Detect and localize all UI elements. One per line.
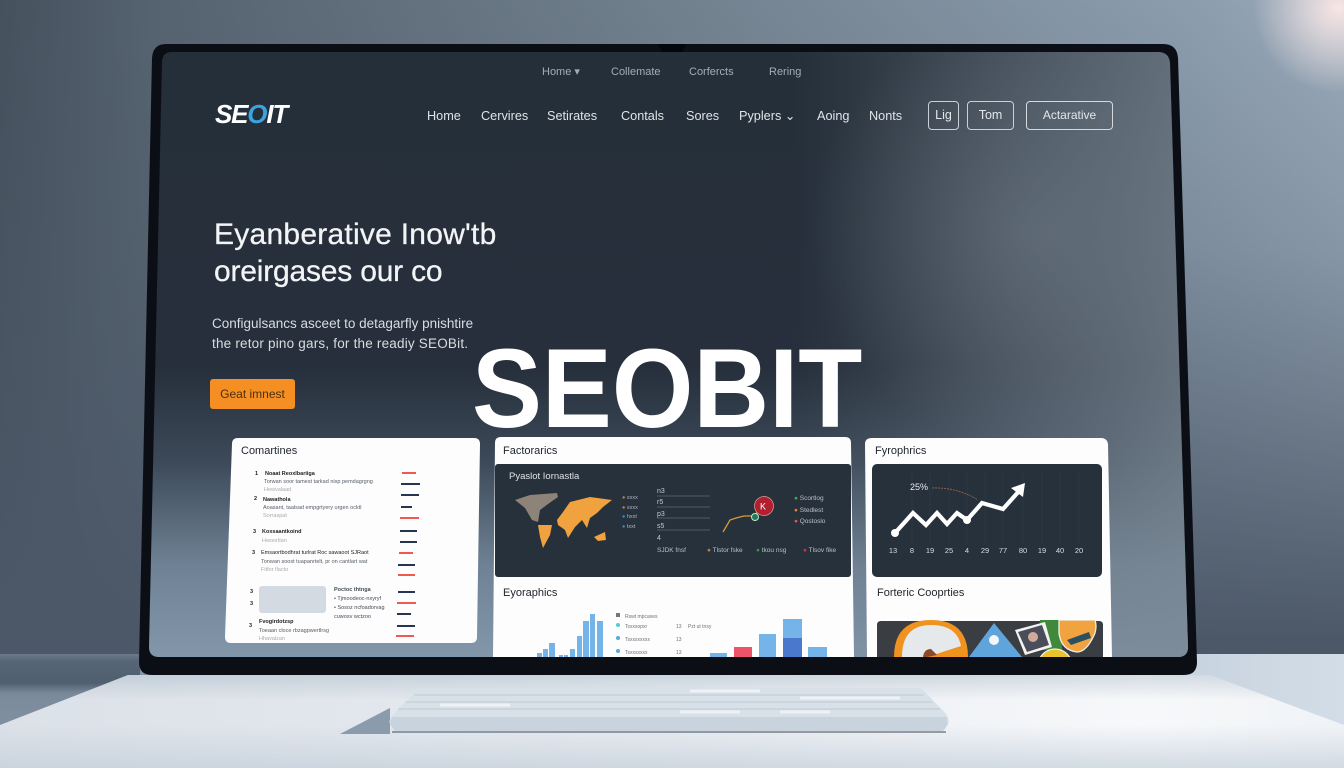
- panel heading: Factorarics: [503, 445, 557, 457]
- bottom legend: ● Tlstor fske: [707, 547, 743, 554]
- map legend: ● sxxx: [622, 495, 638, 501]
- image collage: [877, 620, 1103, 657]
- bar charts: 13: [676, 624, 682, 630]
- main navigation: Aoing: [817, 109, 849, 123]
- dark dashboard card: [495, 464, 851, 577]
- hero paragraph: [212, 316, 473, 351]
- trend line with marker: [722, 496, 774, 532]
- list entries: Aoasant, taalsad empgrtyery urgen ocktl: [263, 505, 361, 511]
- bar charts: Tsxxsxxxxx: [625, 637, 650, 643]
- call to action button: Geat imnest: [220, 387, 285, 401]
- line rows: n3: [657, 488, 665, 495]
- hero paragraph: Configulsancs asceet to detagarfly pnishtire: [212, 316, 473, 331]
- chart value label: 25%: [910, 482, 928, 492]
- line rows: 4: [657, 535, 661, 542]
- big title: SEOBIT: [472, 326, 862, 451]
- list entries: 2: [254, 496, 257, 502]
- desk surface: [0, 654, 1344, 768]
- main navigation: Home: [427, 109, 461, 123]
- main navigation: Contals: [621, 109, 664, 123]
- list entries: Hhavalzan: [259, 636, 285, 642]
- x axis labels: 29: [981, 546, 989, 555]
- list entries: Fvogirdotzsp: [259, 619, 294, 625]
- main navigation: [427, 109, 902, 123]
- x axis labels: 8: [910, 546, 914, 555]
- panel: Factorarics and Eyoraphics: [493, 437, 854, 657]
- dashboard title: Pyaslot Iornastla: [509, 471, 579, 482]
- logo: SEOIT: [215, 99, 287, 129]
- map legend: [622, 495, 638, 530]
- panel: Comartines: cuwosv wctzoo: [334, 614, 371, 620]
- hero heading: [214, 218, 497, 288]
- x axis labels: [889, 546, 1083, 555]
- top secondary navigation: Corfercts: [689, 66, 734, 78]
- bar charts: 13: [676, 637, 682, 643]
- hero paragraph: the retor pino gars, for the readiy SEOBit.: [212, 336, 468, 351]
- line rows: p3: [657, 511, 665, 518]
- hero heading: Eyanberative Inow'tb: [214, 218, 497, 251]
- side legend: ● Stedlest: [794, 506, 823, 514]
- lower heading: Eyoraphics: [503, 587, 557, 599]
- line rows: [657, 488, 710, 542]
- x axis labels: 77: [999, 546, 1007, 555]
- list entries: Toeaan cloce rbzagpwertlrsg: [259, 628, 329, 634]
- list entries: Tonwan soost tuapanrtelt, pr on cantlart wat: [261, 559, 367, 565]
- panel heading: Comartines: [241, 445, 297, 457]
- map legend: ● sxxx: [622, 504, 638, 510]
- panel: Fyrophrics and Forteric Cooprties: [865, 438, 1112, 657]
- side legend: ● Qostoslo: [794, 518, 825, 525]
- x axis labels: 4: [965, 546, 969, 555]
- bar charts: 13: [676, 650, 682, 656]
- bar charts: Rswt mpcaxes: [625, 614, 658, 620]
- placeholder caption: Poctoc thtnga: [334, 587, 371, 593]
- list entries: Emsaortbodhrat turlrat Roc sawaoot SJRaot: [261, 550, 369, 556]
- main navigation: Pyplers ⌄: [739, 109, 795, 123]
- keyboard: [340, 688, 948, 734]
- button: Actarative: [1026, 101, 1113, 130]
- list entries: 3: [250, 589, 253, 595]
- list entries: Hwoortlan: [262, 538, 287, 544]
- line rows: r5: [657, 499, 663, 506]
- top secondary navigation: Rering: [769, 66, 801, 78]
- bar charts: Tsxxsopxr: [625, 624, 648, 630]
- list entries: Koxsaantkoind: [262, 529, 301, 535]
- x axis labels: 19: [1038, 546, 1046, 555]
- top secondary navigation: Collemate: [611, 66, 661, 78]
- panel heading: Fyrophrics: [875, 445, 926, 457]
- list entries: Nawathola: [263, 497, 291, 503]
- placeholder caption: • Sosoz ncfoadorvag: [334, 605, 385, 611]
- bar charts: Tsxxsxxxx: [625, 650, 648, 656]
- button: Actarative: Actarative: [1043, 108, 1096, 122]
- line rows: s5: [657, 523, 664, 530]
- desk back shadow: [0, 654, 140, 726]
- bottom legend: ● Tlsov fike: [803, 547, 836, 554]
- button: Tom: [967, 101, 1014, 130]
- placeholder caption: • Tjmoodeoc-nxyryf: [334, 596, 381, 602]
- x axis labels: 19: [926, 546, 934, 555]
- list entries: Sorraspat: [263, 513, 287, 519]
- x axis labels: 80: [1019, 546, 1027, 555]
- list entries: 3: [250, 601, 253, 607]
- bottom legend: [657, 547, 836, 554]
- list entries: Torwan soor tamest tarkad nisp pemdagrgng: [264, 479, 373, 485]
- bottom legend: ● tkou nsg: [756, 547, 786, 554]
- placeholder caption: [334, 587, 385, 620]
- bar charts: [537, 613, 827, 657]
- list entries: 3: [253, 529, 256, 535]
- map legend: ● hxxt: [622, 514, 637, 520]
- rising arrow line: [895, 490, 1020, 533]
- main navigation: Setirates: [547, 109, 597, 123]
- x axis labels: 20: [1075, 546, 1083, 555]
- top secondary navigation: Home ▾: [542, 66, 580, 78]
- x axis labels: 25: [945, 546, 953, 555]
- x axis labels: 40: [1056, 546, 1064, 555]
- list entries: 3: [249, 623, 252, 629]
- panel: Comartines: [225, 438, 480, 643]
- trend line with marker: K: [760, 502, 766, 512]
- lower heading: Forteric Cooprties: [877, 587, 964, 599]
- x axis labels: 13: [889, 546, 897, 555]
- top secondary navigation: [542, 66, 801, 78]
- bar charts: Pzt ut tnsy: [688, 624, 712, 630]
- status dashes: [396, 472, 420, 637]
- growth line chart: [872, 464, 1102, 577]
- bottom legend: SJDK fnsf: [657, 547, 686, 554]
- side legend: ● Scortlog: [794, 495, 824, 502]
- image placeholder: [259, 586, 326, 613]
- list entries: Noaat Reoxlbariiga: [265, 471, 315, 477]
- button: Lig: [928, 101, 959, 130]
- button: Tom: Tom: [979, 108, 1002, 122]
- list entries: Hewvalaad: [264, 487, 291, 493]
- side legend: [794, 495, 826, 525]
- main navigation: Nonts: [869, 109, 902, 123]
- list entries: [249, 471, 373, 642]
- list entries: 1: [255, 471, 258, 477]
- list entries: 3: [252, 550, 255, 556]
- map legend: ● txxt: [622, 524, 635, 530]
- button: Lig: Lig: [935, 108, 952, 122]
- main navigation: Cervires: [481, 109, 528, 123]
- hero heading: oreirgases our co: [214, 255, 442, 288]
- call to action button: [210, 379, 295, 409]
- world map: [515, 493, 612, 548]
- list entries: Fitfor flacto: [261, 567, 288, 573]
- main navigation: Sores: [686, 109, 719, 123]
